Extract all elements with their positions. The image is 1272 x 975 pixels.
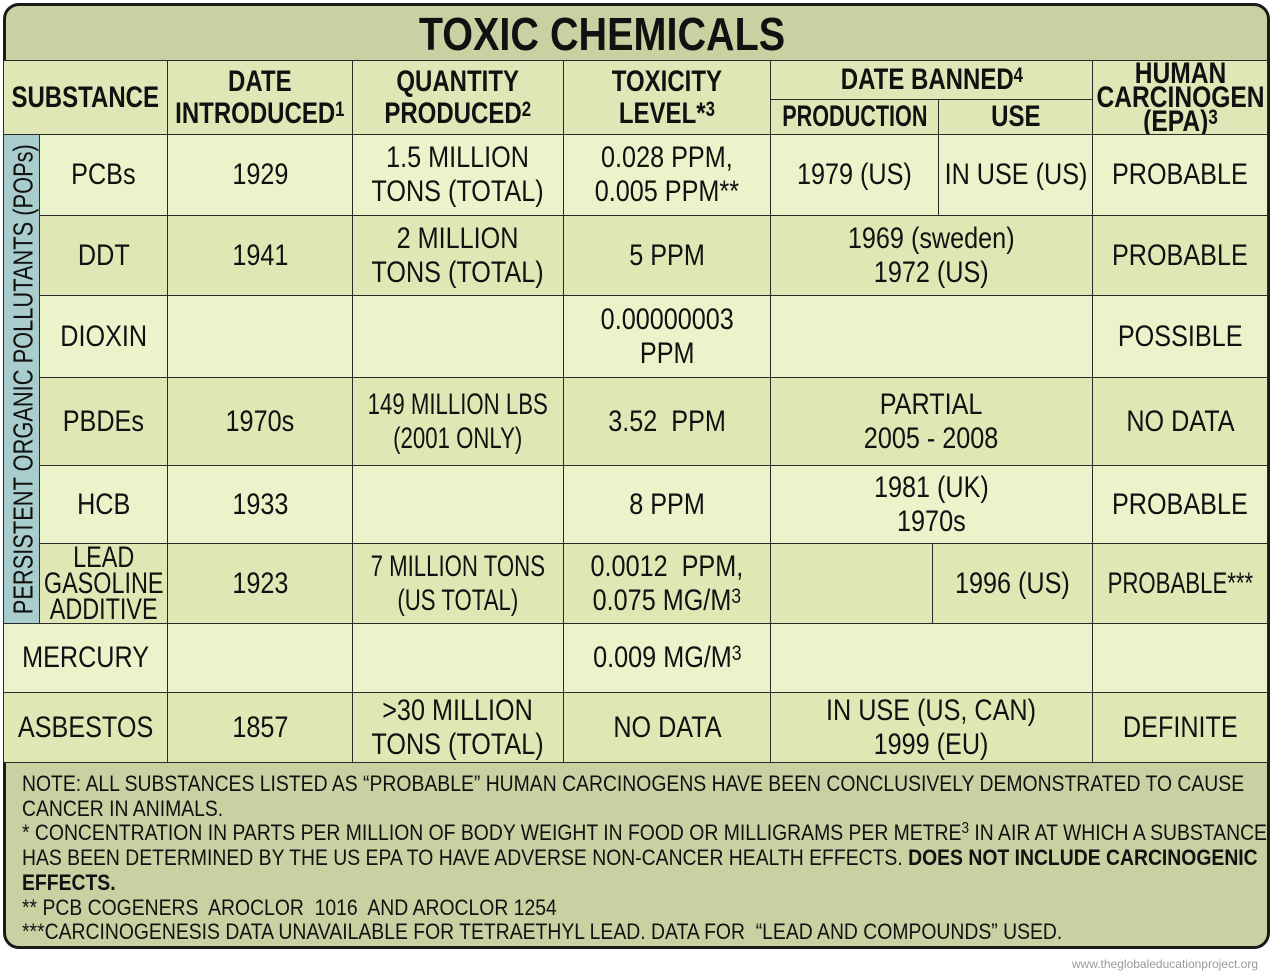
text: HCB — [77, 488, 130, 520]
text: 1972 (US) — [874, 256, 989, 288]
text: DATE — [228, 64, 292, 98]
text: PROBABLE — [1112, 238, 1248, 272]
text: 1857 — [232, 710, 288, 744]
text: USE — [991, 100, 1040, 133]
text: 2 MILLION — [397, 222, 519, 254]
text: (US TOTAL) — [398, 584, 518, 616]
watermark: www.theglobaleducationproject.org — [1072, 957, 1258, 971]
text: DDT — [78, 238, 129, 272]
text: PROBABLE — [1112, 488, 1248, 520]
text: POSSIBLE — [1118, 320, 1242, 352]
text: INTRODUCED1 — [175, 96, 345, 130]
text: 1969 (sweden) — [848, 222, 1015, 254]
notes: EFFECTS. — [22, 870, 116, 895]
text: PRODUCTION — [782, 100, 927, 133]
notes: CANCER IN ANIMALS. — [22, 796, 223, 821]
text: SUBSTANCE — [12, 80, 159, 114]
text: ASBESTOS — [18, 710, 153, 744]
title: TOXIC CHEMICALS — [418, 8, 785, 60]
text: 1929 — [232, 158, 288, 191]
text: 3.52 PPM — [608, 404, 726, 438]
text: 149 MILLION LBS — [368, 388, 548, 420]
header row — [3, 56, 1268, 138]
text: 0.028 PPM, — [601, 141, 733, 174]
text: PBDEs — [63, 404, 144, 438]
text: NO DATA — [613, 710, 721, 744]
text: LEAD — [73, 540, 134, 574]
row: MERCURY — [3, 624, 1268, 692]
text: 0.009 MG/M3 — [593, 641, 741, 674]
row: DDT — [40, 216, 1268, 295]
text: IN USE (US, CAN) — [826, 694, 1037, 726]
text: (EPA)3 — [1143, 104, 1217, 138]
notes: * CONCENTRATION IN PARTS PER MILLION OF BODY WEIGHT IN FOOD OR MILLIGRAMS PER METRE3 IN AIR AT WHICH A SUBSTANCE — [22, 820, 1267, 845]
text: 0.075 MG/M3 — [593, 584, 741, 616]
text: 8 PPM — [629, 488, 705, 520]
text: CARCINOGEN — [1096, 80, 1264, 114]
text: 1996 (US) — [955, 566, 1070, 600]
text: 7 MILLION TONS — [371, 550, 545, 582]
notes: ** PCB COGENERS AROCLOR 1016 AND AROCLOR 1254 — [22, 895, 557, 920]
text: MERCURY — [22, 641, 149, 674]
text: (2001 ONLY) — [393, 422, 523, 454]
text: 1.5 MILLION — [387, 141, 529, 174]
text: 1999 (EU) — [874, 728, 989, 760]
row: PBDEs — [40, 378, 1268, 465]
notes: NOTE: ALL SUBSTANCES LISTED AS “PROBABLE” HUMAN CARCINOGENS HAVE BEEN CONCLUSIVELY DEMONSTRATED TO CAUSE — [22, 771, 1244, 796]
text: TOXICITY — [612, 64, 722, 98]
text: ADDITIVE — [50, 592, 157, 626]
text: 1941 — [232, 238, 288, 272]
text: QUANTITY — [397, 64, 519, 98]
text: PROBABLE*** — [1107, 566, 1253, 600]
text: DIOXIN — [60, 320, 147, 352]
text: 1981 (UK) — [874, 470, 989, 504]
text: DATE BANNED4 — [840, 63, 1023, 96]
text: PROBABLE — [1112, 158, 1248, 191]
text: 1970s — [897, 504, 966, 538]
row: ASBESTOS — [3, 693, 1268, 763]
text: IN USE (US) — [944, 158, 1087, 191]
text: TONS (TOTAL) — [372, 256, 544, 288]
text: PCBs — [71, 158, 136, 191]
notes: ***CARCINOGENESIS DATA UNAVAILABLE FOR TETRAETHYL LEAD. DATA FOR “LEAD AND COMPOUNDS” USED. — [22, 919, 1062, 944]
text: HUMAN — [1134, 56, 1226, 90]
text: 0.0012 PPM, — [591, 550, 743, 582]
notes — [22, 771, 1267, 944]
row: PCBs — [40, 134, 1268, 215]
text: 1933 — [232, 488, 288, 520]
text: TONS (TOTAL) — [372, 175, 544, 208]
text: PRODUCED2 — [385, 96, 531, 130]
row: DIOXIN — [40, 296, 1268, 377]
text: TONS (TOTAL) — [372, 728, 544, 760]
row: LEAD — [40, 540, 1268, 626]
side label: POPs: PERSISTENT ORGANIC POLLUTANTS (POPs) — [7, 144, 38, 615]
row: HCB — [40, 466, 1268, 543]
text: >30 MILLION — [383, 694, 533, 726]
text: LEVEL*3 — [619, 96, 715, 130]
text: 1970s — [226, 404, 294, 438]
text: PARTIAL — [880, 388, 983, 420]
text: 1979 (US) — [797, 158, 912, 191]
text: 1923 — [232, 566, 288, 600]
text: NO DATA — [1126, 404, 1234, 438]
text: GASOLINE — [44, 566, 163, 600]
notes: HAS BEEN DETERMINED BY THE US EPA TO HAVE ADVERSE NON-CANCER HEALTH EFFECTS. DOES NOT INCLUDE CARCINOGENIC — [22, 845, 1258, 870]
text: 2005 - 2008 — [864, 422, 999, 454]
text: 0.005 PPM** — [595, 175, 739, 208]
text: 0.00000003 — [600, 302, 734, 336]
text: 5 PPM — [629, 238, 705, 272]
text: DEFINITE — [1123, 710, 1237, 744]
text: PPM — [640, 336, 694, 370]
